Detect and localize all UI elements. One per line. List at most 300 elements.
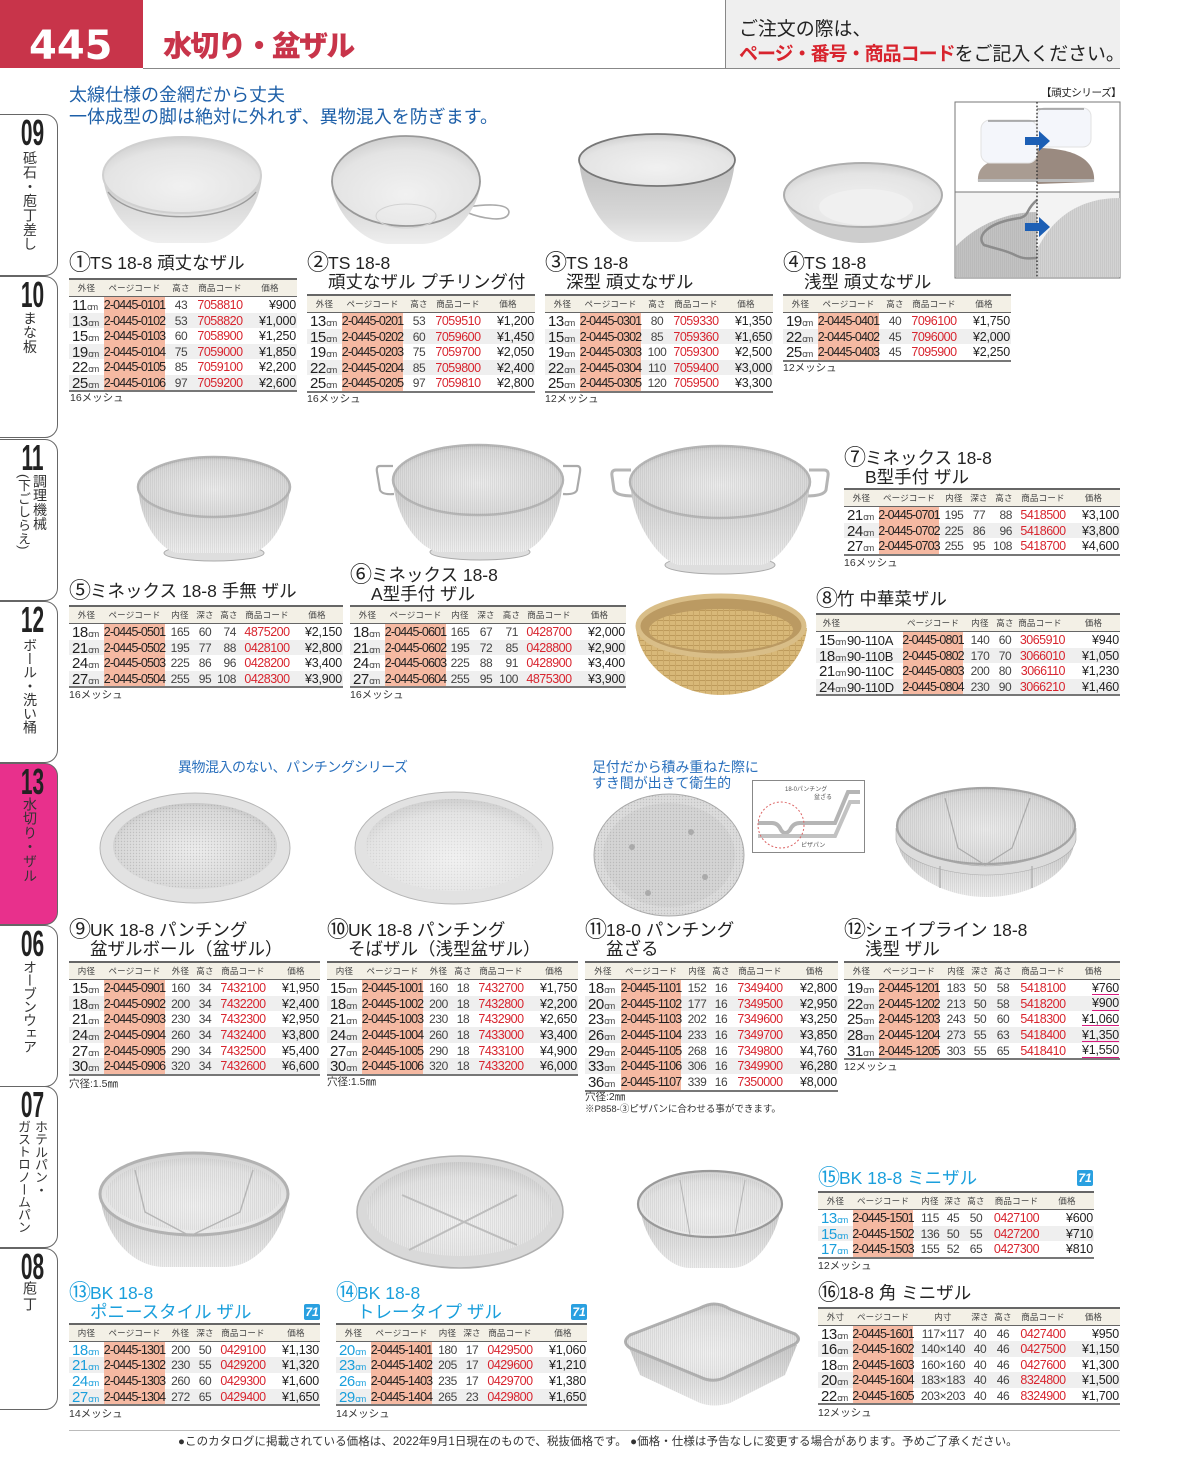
- table 10: 内径: [336, 966, 353, 976]
- table 6: 255: [451, 672, 469, 686]
- table 2: 15cm: [310, 328, 336, 346]
- table 13: 価格: [287, 1328, 305, 1338]
- table 10: 高さ: [454, 966, 472, 976]
- table 5: ¥2,150: [305, 625, 342, 639]
- table 11: ¥2,800: [800, 981, 837, 995]
- note 13: 14メッシュ: [69, 1408, 123, 1420]
- table 14: 2-0445-1403: [371, 1374, 432, 1388]
- table 11: 306: [688, 1059, 706, 1073]
- table 4: 7096100: [911, 314, 957, 328]
- table 11: 177: [688, 997, 706, 1011]
- table 2: [307, 294, 535, 392]
- table 8: 60: [999, 633, 1011, 647]
- image: pan stacking diagram: 盆ざる: [814, 793, 832, 801]
- table 8: 90-110C: [847, 664, 894, 679]
- table 2: 高さ: [410, 299, 428, 309]
- table 14: 商品コード: [488, 1328, 532, 1338]
- table 7: ページコード: [883, 493, 935, 503]
- table 12: 高さ: [994, 966, 1012, 976]
- table 5: 高さ: [220, 610, 238, 620]
- table 5: 88: [223, 640, 236, 654]
- table 13: 260: [171, 1374, 190, 1388]
- table 5: ¥3,400: [305, 656, 342, 670]
- table 14: 17: [466, 1374, 478, 1388]
- sidebar tab 07: ホテルパン・: [33, 1120, 48, 1196]
- page number block: 445: [29, 23, 112, 69]
- table 9: 2-0445-0903: [104, 1012, 165, 1026]
- table 16: 160×160: [921, 1358, 965, 1372]
- table 3: 商品コード: [674, 299, 718, 309]
- table 11: 商品コード: [738, 966, 782, 976]
- heading 16: 18-8 角 ミニザル: [839, 1283, 971, 1303]
- table 13: 外径: [172, 1328, 189, 1338]
- table 7: 商品コード: [1021, 493, 1065, 503]
- table 4: 7096000: [911, 330, 957, 344]
- table 11: 16: [715, 1059, 727, 1073]
- heading 6: ミネックス 18-8: [371, 565, 498, 585]
- sidebar tab 13 active: [0, 763, 58, 925]
- table 14: 235: [438, 1374, 457, 1388]
- table 15: 商品コード: [995, 1196, 1038, 1206]
- heading 6: [350, 562, 498, 604]
- table 8: 24cm: [819, 678, 845, 696]
- sidebar tab 13 active: 水切り・ザル: [22, 797, 38, 883]
- table 3: ¥1,350: [735, 314, 772, 328]
- table 16: 2-0445-1603: [852, 1358, 914, 1372]
- heading 15: [818, 1165, 977, 1190]
- table 4: 45: [889, 330, 901, 344]
- table 5: 27cm: [72, 670, 98, 688]
- note 5: 16メッシュ: [69, 689, 123, 701]
- table 8: 170: [971, 648, 989, 662]
- table 4: ページコード: [822, 299, 875, 309]
- sidebar tab 10: 10: [21, 274, 44, 315]
- table 13: 2-0445-1302: [104, 1358, 165, 1372]
- table 15: ¥710: [1066, 1226, 1093, 1240]
- table 5: 74: [223, 625, 236, 639]
- table 9: ページコード: [108, 966, 161, 976]
- table 9: 15cm: [72, 980, 98, 997]
- heading 1: ①: [69, 250, 89, 275]
- image: bowl 4 shallow: [783, 163, 943, 243]
- table 3: ¥1,650: [735, 330, 772, 344]
- image: punching plate 10: [355, 792, 553, 904]
- table 1: 22cm: [72, 359, 98, 376]
- heading 10: [327, 917, 540, 959]
- table 16: 2-0445-1602: [852, 1342, 914, 1356]
- table 9: 高さ: [196, 966, 214, 976]
- table 8: 3066110: [1021, 664, 1065, 678]
- heading 10: ⑩: [327, 917, 347, 942]
- table 3: 高さ: [648, 299, 666, 309]
- table 3: 7059300: [673, 345, 719, 359]
- table 7: 内径: [945, 493, 963, 503]
- table 5: 165: [171, 625, 189, 639]
- table 12: 2-0445-1203: [878, 1012, 940, 1026]
- table 4: 2-0445-0403: [818, 345, 879, 359]
- table 3: 7059500: [673, 376, 719, 390]
- table 6: 91: [505, 656, 518, 670]
- table 12: 25cm: [847, 1011, 873, 1028]
- table 13: 2-0445-1304: [104, 1390, 165, 1404]
- table 15: 55: [970, 1226, 982, 1240]
- table 7: 価格: [1085, 493, 1102, 503]
- table 5: 21cm: [72, 640, 98, 656]
- table 12: 2-0445-1202: [878, 997, 940, 1011]
- table 16: 40: [974, 1326, 986, 1340]
- table 4: 19cm: [786, 313, 812, 330]
- table 16: 140×140: [921, 1342, 965, 1356]
- table 2: 7059800: [435, 360, 481, 374]
- note 11: 穴径:2㎜: [585, 1091, 625, 1103]
- heading 2: TS 18-8: [328, 253, 390, 273]
- table 6: 100: [499, 672, 518, 686]
- image: mini basket 15: [638, 1171, 782, 1268]
- table 2: 2-0445-0202: [342, 330, 403, 344]
- table 8: 18cm: [819, 648, 845, 664]
- table 9: 260: [171, 1028, 190, 1042]
- footer note: ●このカタログに掲載されている価格は、2022年9月1日現在のもので、税抜価格です。 ●価格・仕様は予告なしに変更する場合があります。予めご了承ください。: [178, 1436, 1018, 1448]
- table 15: ¥810: [1066, 1242, 1093, 1256]
- table 3: 19cm: [548, 344, 574, 361]
- table 16: ¥1,300: [1082, 1358, 1119, 1372]
- note 14: 14メッシュ: [336, 1408, 390, 1420]
- table 14: 0429700: [487, 1374, 533, 1388]
- table 5: 24cm: [72, 655, 98, 672]
- table 12: 213: [947, 997, 965, 1011]
- table 10: 商品コード: [479, 966, 523, 976]
- heading 11: 18-0 パンチング: [606, 920, 734, 940]
- heading 14: ⑭: [336, 1280, 356, 1305]
- table 6: 商品コード: [527, 610, 571, 620]
- table 15: 45: [947, 1211, 959, 1225]
- table 4: 外径: [792, 299, 809, 309]
- sidebar tab 07: 07: [21, 1084, 44, 1125]
- table 1: 7058900: [197, 329, 243, 343]
- table 1: 2-0445-0106: [104, 376, 165, 390]
- table 5: 86: [199, 656, 211, 670]
- table 6: 165: [451, 625, 469, 639]
- heading 4: [783, 250, 931, 292]
- table 8: 内径: [971, 618, 989, 628]
- table 6: 4875300: [526, 672, 572, 686]
- table 16: 2-0445-1605: [852, 1389, 914, 1403]
- table 1: 7059200: [197, 376, 243, 390]
- table 16: 0427500: [1020, 1342, 1066, 1356]
- table 9: ¥6,600: [282, 1059, 319, 1073]
- table 16: 46: [997, 1342, 1009, 1356]
- image: shape-line basket 12: [896, 788, 1076, 897]
- table 12: 5418400: [1020, 1028, 1066, 1042]
- table 12: 価格: [1085, 966, 1102, 976]
- table 10: 290: [429, 1044, 448, 1058]
- table 7: 86: [973, 524, 985, 538]
- note 11: ※P858-③ピザパンに合わせる事ができます。: [585, 1104, 781, 1115]
- table 3: 2-0445-0304: [580, 360, 641, 374]
- table 9: 内径: [78, 966, 95, 976]
- heading 4: ④: [783, 250, 803, 275]
- table 7: 深さ: [970, 493, 988, 503]
- note 6: 16メッシュ: [350, 689, 404, 701]
- table 6: 2-0445-0601: [385, 625, 446, 639]
- table 6: 価格: [591, 610, 608, 620]
- note 7: 16メッシュ: [844, 557, 898, 569]
- sidebar tab 12: ボール・洗い桶: [22, 638, 38, 734]
- table 14: 180: [438, 1342, 457, 1356]
- table 5: 2-0445-0501: [104, 625, 165, 639]
- photo panel: series comparison photos: [955, 102, 1120, 278]
- table 10: 価格: [545, 966, 563, 976]
- table 15: ¥600: [1066, 1211, 1093, 1225]
- table 7: 2-0445-0703: [878, 539, 940, 553]
- table 8: 2-0445-0804: [902, 680, 964, 694]
- table 9: 34: [199, 1044, 211, 1058]
- heading 4: 浅型 頑丈なザル: [804, 272, 931, 292]
- table 6: 27cm: [353, 670, 379, 688]
- table 13: ¥1,130: [282, 1342, 319, 1356]
- table 3: 22cm: [548, 360, 574, 376]
- heading 6: ⑥: [350, 562, 370, 587]
- table 5: 0428100: [244, 640, 290, 654]
- table 9: 2-0445-0905: [104, 1044, 165, 1058]
- table 15: 136: [921, 1226, 939, 1240]
- page title: 水切り・盆ザル: [163, 31, 353, 63]
- table 13: 2-0445-1301: [104, 1342, 165, 1356]
- table 1: 2-0445-0103: [104, 329, 165, 343]
- table 11: 23cm: [588, 1011, 614, 1028]
- table 9: ¥3,800: [282, 1028, 319, 1042]
- heading 1: TS 18-8 頑丈なザル: [90, 253, 245, 273]
- table 11: 7349500: [737, 997, 783, 1011]
- table 16: 0427400: [1020, 1326, 1066, 1340]
- sidebar tab 11: [0, 439, 58, 601]
- table 8: 高さ: [996, 618, 1014, 628]
- table 8: 3066210: [1020, 680, 1065, 694]
- sidebar tab 06: 06: [21, 923, 44, 964]
- sidebar tab 13 active: 13: [21, 761, 44, 802]
- heading 7: [844, 445, 992, 487]
- table 10: 18: [457, 1044, 469, 1058]
- table 1: ¥900: [269, 298, 296, 312]
- table 14: 23cm: [339, 1357, 365, 1374]
- table 10: 2-0445-1003: [362, 1012, 423, 1026]
- note 4: 12メッシュ: [783, 362, 837, 374]
- table 11: 2-0445-1107: [621, 1075, 681, 1089]
- table 15: 17cm: [821, 1241, 847, 1258]
- note 1: 16メッシュ: [70, 392, 124, 404]
- table 3: 7059330: [673, 314, 719, 328]
- table 12: 2-0445-1201: [878, 981, 940, 995]
- table 14: 2-0445-1401: [371, 1342, 432, 1356]
- table 9: 34: [199, 1028, 211, 1042]
- table 12: 58: [997, 981, 1009, 995]
- caption: punching series: 異物混入のない、パンチングシリーズ: [178, 759, 408, 775]
- table 11: 36cm: [588, 1074, 614, 1091]
- table 11: 339: [688, 1075, 706, 1089]
- caption: stacking hygiene: 足付だから積み重ねた際に: [592, 759, 759, 775]
- table 8: 90: [999, 680, 1011, 694]
- table 3: 25cm: [548, 375, 574, 392]
- table 15: 外径: [827, 1196, 844, 1206]
- table 3: 85: [651, 330, 663, 344]
- table 12: 273: [947, 1028, 965, 1042]
- table 12: 50: [974, 981, 986, 995]
- table 12: ¥760: [1092, 980, 1119, 994]
- table 3: ¥3,300: [735, 376, 772, 390]
- table 9: 34: [199, 981, 211, 995]
- table 8: 90-110B: [847, 648, 893, 664]
- table 10: 7433000: [478, 1028, 524, 1042]
- image: bowl 2 with ring handle: [331, 136, 509, 244]
- table 12: 50: [974, 1012, 986, 1026]
- table 2: 25cm: [310, 375, 336, 392]
- table 3: 2-0445-0305: [580, 376, 641, 390]
- table 8: 200: [971, 664, 989, 678]
- table 5: 108: [217, 672, 236, 686]
- table 2: 商品コード: [436, 299, 480, 309]
- table 13: 商品コード: [221, 1328, 265, 1338]
- table 1: 60: [175, 329, 187, 343]
- image: bowl 1: [103, 137, 262, 243]
- table 6: ¥2,000: [588, 625, 625, 639]
- table 16: 0427600: [1020, 1358, 1066, 1372]
- table 10: ¥2,650: [540, 1012, 577, 1026]
- table 5: 深さ: [196, 610, 214, 620]
- table 3: 7059360: [673, 330, 719, 344]
- table 10: 15cm: [330, 980, 356, 997]
- table 1: 2-0445-0102: [104, 314, 165, 328]
- table 2: 60: [413, 330, 425, 344]
- heading 10: UK 18-8 パンチング: [348, 920, 505, 940]
- table 4: 価格: [975, 299, 993, 309]
- table 14: 2-0445-1402: [371, 1358, 432, 1372]
- heading 2: [307, 250, 525, 292]
- sidebar tab 12: [0, 601, 58, 763]
- table 14: 20cm: [339, 1342, 365, 1358]
- caption: stacking hygiene: すき間が出きて衛生的: [592, 775, 731, 791]
- heading 12: シェイプライン 18-8: [865, 920, 1027, 940]
- note 15: 12メッシュ: [818, 1260, 872, 1272]
- table 10: 18: [457, 1028, 469, 1042]
- table 4: ¥2,250: [973, 345, 1010, 359]
- table 13: 55: [199, 1358, 211, 1372]
- table 15: 高さ: [967, 1196, 985, 1206]
- sidebar tab 09: [0, 114, 58, 276]
- image: bamboo basket 8: [636, 596, 807, 695]
- table 13: 65: [199, 1390, 211, 1404]
- heading 12: [844, 917, 1027, 959]
- heading 13: [69, 1280, 252, 1322]
- table 16: [818, 1306, 1120, 1405]
- table 13: 24cm: [72, 1373, 98, 1390]
- table 13: 230: [171, 1358, 190, 1372]
- table 6: 85: [505, 640, 518, 654]
- table 8: 3066010: [1020, 648, 1065, 662]
- sidebar tab 11: (下ごしらえ): [16, 474, 31, 550]
- table 11: 外径: [594, 966, 612, 976]
- table 13: 0429400: [220, 1390, 266, 1404]
- table 10: 7433100: [478, 1044, 524, 1058]
- image: tray-type basket 14: [357, 1156, 563, 1268]
- table 4: 22cm: [786, 328, 812, 346]
- table 6: 2-0445-0603: [385, 656, 446, 670]
- table 6: 21cm: [353, 640, 379, 656]
- table 12: 63: [997, 1028, 1009, 1042]
- table 6: 225: [451, 656, 469, 670]
- table 10: 7432800: [478, 997, 524, 1011]
- image: pan stacking diagram: [752, 780, 864, 852]
- table 12: 58: [997, 997, 1009, 1011]
- table 2: 7059600: [435, 330, 481, 344]
- table 5: 95: [199, 672, 211, 686]
- table 15: 0427100: [994, 1211, 1039, 1225]
- sidebar tab 08: [0, 1248, 58, 1410]
- table 1: 75: [175, 344, 187, 358]
- table 3: 80: [651, 314, 663, 328]
- table 9: 34: [199, 1012, 211, 1026]
- badge 15: 71: [1078, 1171, 1092, 1185]
- table 9: 2-0445-0906: [104, 1059, 165, 1073]
- table 14: 17: [466, 1358, 478, 1372]
- table 9: 7432600: [220, 1059, 266, 1073]
- table 15: ページコード: [857, 1196, 909, 1206]
- image: pan stacking diagram: 18-0パンチング: [785, 785, 827, 793]
- heading 14: [336, 1280, 502, 1322]
- heading 15: ⑮: [818, 1165, 838, 1190]
- table 11: 29cm: [588, 1043, 614, 1060]
- table 1: ¥1,250: [259, 329, 296, 343]
- note 3: 12メッシュ: [545, 393, 599, 405]
- table 9: 230: [171, 1012, 190, 1026]
- table 12: ¥900: [1092, 996, 1119, 1010]
- table 15: 価格: [1058, 1196, 1076, 1206]
- table 12: 5418300: [1020, 1012, 1066, 1026]
- order notice panel: ページ・番号・商品コードをご記入ください。: [739, 44, 1125, 65]
- table 7: ¥3,100: [1082, 508, 1119, 522]
- table 7: 5418500: [1020, 508, 1066, 522]
- table 1: 13cm: [72, 312, 98, 330]
- table 5: ページコード: [108, 610, 161, 620]
- table 7: 27cm: [847, 538, 873, 555]
- heading 2: 頑丈なザル プチリング付: [328, 272, 525, 292]
- table 1: 7059100: [197, 360, 243, 374]
- table 6: ¥3,400: [588, 656, 625, 670]
- table 9: 7432500: [220, 1044, 266, 1058]
- table 10: 7433200: [478, 1059, 524, 1073]
- table 1: ¥2,200: [259, 360, 296, 374]
- image: punching plate 9: [100, 793, 290, 903]
- table 5: ¥3,900: [305, 672, 342, 686]
- table 3: 7059400: [673, 360, 719, 374]
- table 13: ¥1,600: [282, 1374, 319, 1388]
- table 16: 8324800: [1020, 1373, 1066, 1387]
- table 16: ¥1,700: [1082, 1389, 1119, 1403]
- table 8: ¥1,050: [1082, 648, 1119, 662]
- table 7: 5418700: [1020, 539, 1066, 553]
- table 8: 21cm: [819, 663, 845, 680]
- table 15: 50: [947, 1226, 959, 1240]
- caption: stacking hygiene: [592, 759, 759, 791]
- table 14: 深さ: [463, 1328, 481, 1338]
- table 9: 7432400: [220, 1028, 266, 1042]
- table 11: ¥6,280: [800, 1059, 837, 1073]
- heading 14: BK 18-8: [357, 1283, 420, 1303]
- heading 9: ⑨: [69, 917, 89, 942]
- table 7: 高さ: [995, 493, 1013, 503]
- table 8: 2-0445-0801: [902, 633, 964, 647]
- table 11: 16: [715, 997, 727, 1011]
- table 16: ¥1,500: [1082, 1373, 1119, 1387]
